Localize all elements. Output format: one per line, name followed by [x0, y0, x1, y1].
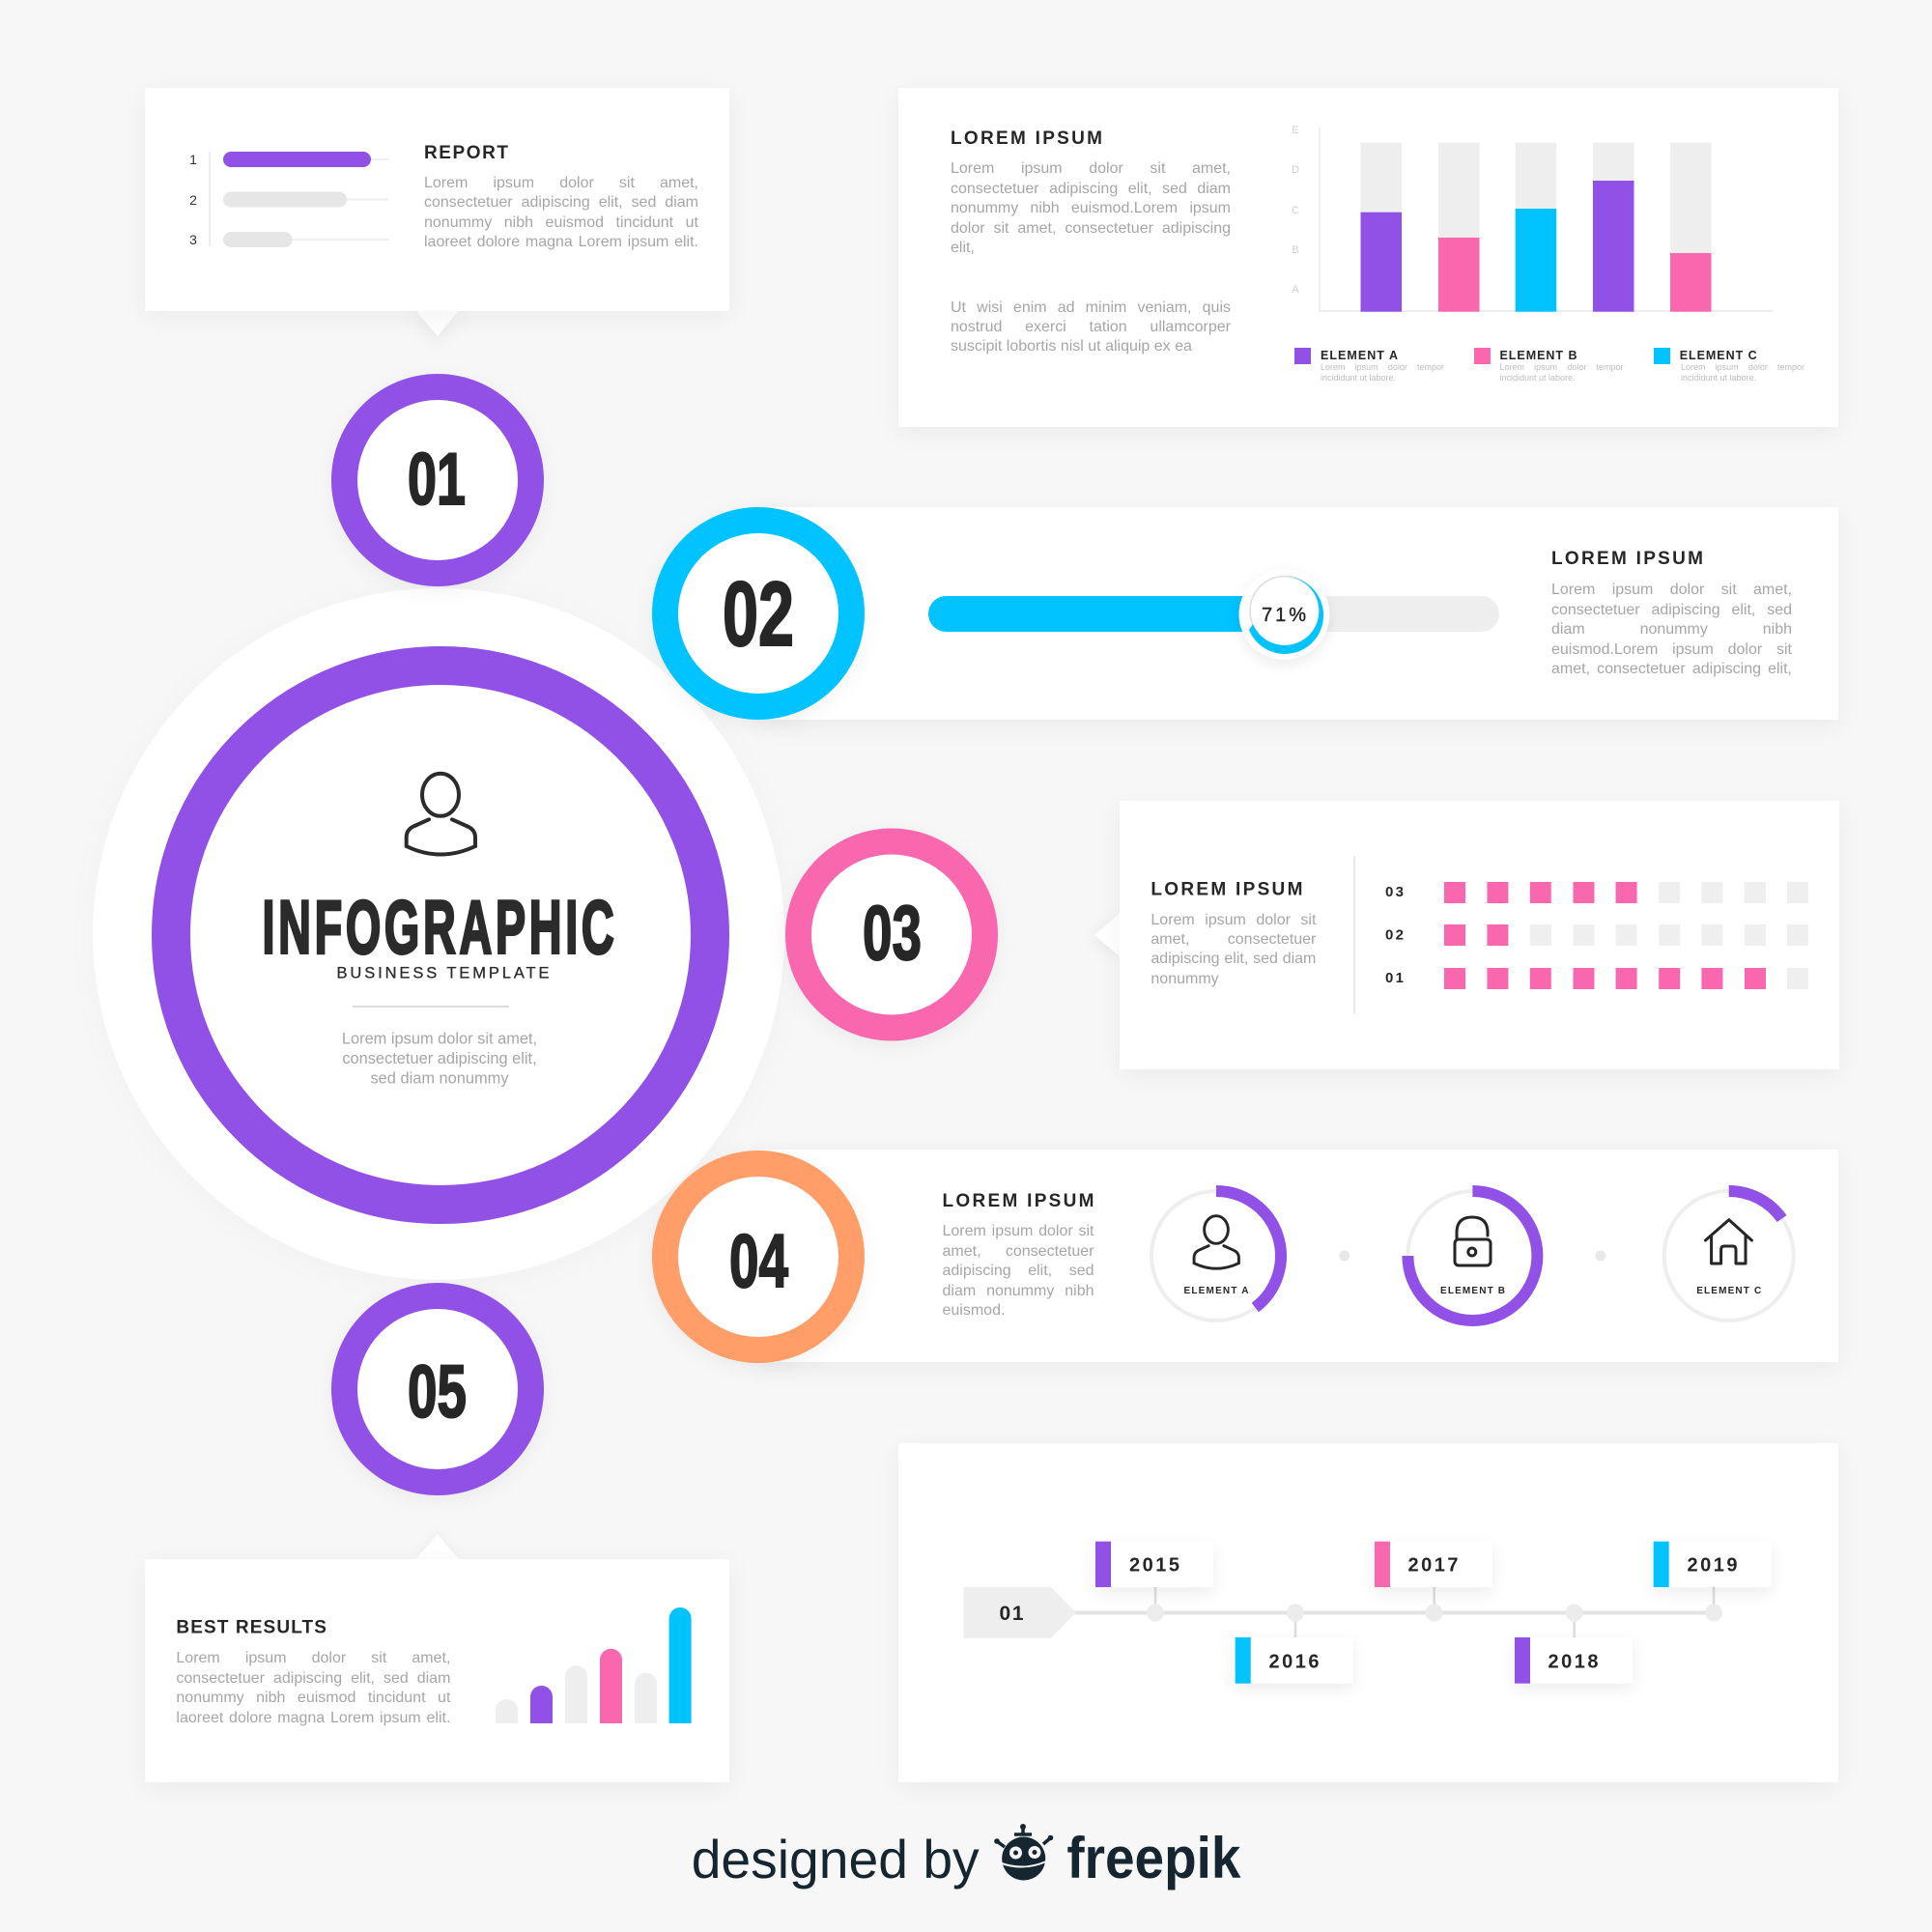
ring: element A: ELEMENT A: [1184, 1286, 1248, 1296]
legend: element B: [1474, 348, 1577, 364]
body text: Lorem ipsum dolor sit amet,: [1551, 582, 1792, 598]
text block 1: Lorem ipsum dolor sit amet,: [951, 160, 1231, 177]
panel: 02 progress: [758, 507, 1838, 720]
timeline graphics: [964, 1542, 1772, 1690]
card 2018: [1515, 1637, 1633, 1684]
chart graphics: [951, 125, 1773, 364]
legend text B: Lorem ipsum dolor tempor: [1499, 362, 1623, 372]
progress knob 71%: 71%: [1262, 605, 1306, 626]
legend text B: incididunt ut labore.: [1499, 373, 1576, 383]
axis labels: B: [1292, 244, 1299, 256]
progress knob 71%: [1238, 569, 1329, 660]
footer credit: freepik: [1066, 1826, 1241, 1890]
report bar chart: [189, 143, 508, 247]
row numbers: 3: [189, 232, 197, 247]
body text: euismod.: [943, 1302, 1005, 1319]
body text: Lorem ipsum dolor sit amet,: [176, 1650, 450, 1666]
footer credit: [692, 1824, 1241, 1890]
legend: element C: [1654, 348, 1757, 364]
axis labels: C: [1292, 205, 1299, 216]
legend text A: Lorem ipsum dolor tempor: [1321, 362, 1444, 372]
start tag 01: [964, 1587, 1076, 1638]
badge 01: [331, 374, 544, 586]
body text: adipiscing elit, sed: [943, 1263, 1094, 1279]
body text: laoreet dolore magna Lorem ipsum elit.: [176, 1710, 450, 1726]
row numbers: 2: [189, 192, 197, 208]
badge 01: 01: [408, 439, 466, 521]
body text: Lorem ipsum dolor sit: [943, 1223, 1094, 1239]
body text: amet, consectetuer: [1151, 931, 1316, 948]
legend: element B: ELEMENT B: [1499, 349, 1577, 362]
card 2016: [1236, 1637, 1353, 1684]
card 2016: 2016: [1269, 1652, 1320, 1673]
card 2017: [1375, 1542, 1492, 1587]
rings graphics: [943, 1185, 1795, 1326]
row labels: 01: [1385, 970, 1404, 986]
progress bar: [928, 596, 1499, 632]
card 2015: 2015: [1129, 1555, 1179, 1577]
row 03 squares: [1444, 882, 1808, 903]
card 2019: 2019: [1687, 1555, 1737, 1577]
squares graphics: [1151, 857, 1808, 1013]
panel: stacked bar chart: [898, 88, 1838, 427]
description: consectetuer adipiscing elit,: [342, 1050, 537, 1067]
panel: timeline: [898, 1443, 1838, 1782]
icon: freepik mascot: [994, 1824, 1053, 1880]
legend: element A: ELEMENT A: [1321, 349, 1398, 362]
badge 03: [785, 829, 998, 1041]
panel: 04 rings: [758, 1150, 1838, 1362]
legend text B: [1499, 362, 1623, 383]
text block 2: suscipit lobortis nisl ut aliquip ex ea: [951, 338, 1192, 355]
footer credit: designed by: [692, 1829, 980, 1889]
body text: Lorem ipsum dolor sit: [1151, 912, 1316, 927]
text block 1: consectetuer adipiscing elit, sed diam: [951, 181, 1231, 197]
panel: 03 squares: [1120, 801, 1839, 1069]
icon: person: [407, 774, 475, 854]
body text: consectetuer adipiscing elit, sed: [1551, 602, 1792, 618]
row 01 squares: [1444, 968, 1808, 989]
body text: nonummy nibh euismod tincidunt ut: [176, 1690, 450, 1706]
report text: consectetuer adipiscing elit, sed diam: [424, 194, 698, 211]
ring: element B: [1407, 1191, 1537, 1321]
card 2019: [1654, 1542, 1772, 1587]
report text: Lorem ipsum dolor sit amet,: [424, 175, 698, 191]
axis labels: D: [1292, 164, 1299, 176]
body text: adipiscing elit, sed diam: [1151, 951, 1316, 967]
rounded bar chart: [496, 1607, 692, 1723]
body text: [1151, 912, 1316, 987]
panel: report: [145, 88, 729, 311]
body text: [176, 1650, 450, 1726]
timeline axis: [1072, 1587, 1722, 1638]
text block 1: nonummy nibh euismod.Lorem ipsum: [951, 200, 1231, 216]
body text: euismod.Lorem ipsum dolor sit: [1551, 641, 1792, 658]
heading: LOREM IPSUM: [943, 1191, 1094, 1211]
separator dots: [1339, 1250, 1605, 1262]
row labels: 03: [1385, 884, 1404, 900]
row numbers: [189, 152, 197, 247]
heading: LOREM IPSUM: [1151, 879, 1302, 900]
description: [342, 1031, 537, 1088]
text block 1: elit,: [951, 240, 975, 256]
body text: amet, consectetuer: [943, 1243, 1094, 1260]
badge 05: [331, 1283, 544, 1495]
body text: diam nonummy nibh: [943, 1283, 1094, 1299]
body text: diam nonummy nibh: [1551, 621, 1792, 638]
axis labels: A: [1292, 284, 1299, 296]
badge 02: 02: [723, 563, 794, 666]
badge 05: 05: [408, 1350, 467, 1434]
legend: element C: ELEMENT C: [1680, 349, 1757, 362]
ring: element B: ELEMENT B: [1440, 1286, 1505, 1296]
badge 02: [652, 507, 865, 720]
legend text C: [1681, 362, 1804, 383]
description: sed diam nonummy: [370, 1070, 509, 1088]
description: Lorem ipsum dolor sit amet,: [342, 1031, 537, 1048]
progress graphics: [928, 549, 1703, 666]
ring: element A: [1151, 1191, 1281, 1321]
heading: LOREM IPSUM: [1551, 549, 1703, 569]
card 2017: 2017: [1408, 1555, 1459, 1577]
legend text A: [1321, 362, 1444, 383]
row numbers: 1: [189, 152, 197, 167]
row 02 squares: [1444, 924, 1808, 946]
report text: [424, 175, 698, 250]
body text: [943, 1223, 1094, 1319]
bars: [209, 152, 388, 247]
axis labels: [1292, 125, 1299, 296]
title: INFOGRAPHIC: [263, 885, 614, 969]
panel: best results: [145, 1559, 729, 1782]
heading: BEST RESULTS: [176, 1618, 327, 1638]
text block 2: Ut wisi enim ad minim veniam, quis: [951, 299, 1231, 315]
body text: nonummy: [1151, 971, 1219, 987]
badge 03: 03: [863, 890, 922, 976]
start tag 01: 01: [999, 1603, 1024, 1625]
axis labels: E: [1292, 125, 1299, 136]
row labels: [1385, 884, 1404, 986]
central circle: [93, 588, 784, 1280]
heading: LOREM IPSUM: [951, 128, 1102, 149]
best results graphics: [176, 1607, 692, 1723]
ring: element C: [1664, 1191, 1794, 1321]
report text: nonummy nibh euismod tincidunt ut: [424, 214, 698, 231]
text block 2: nostrud exerci tation ullamcorper: [951, 319, 1231, 335]
legend: element A: [1294, 348, 1398, 364]
body text: [1551, 582, 1792, 677]
body text: amet, consectetuer adipiscing elit,: [1551, 661, 1792, 677]
row labels: 02: [1385, 927, 1404, 943]
text block 1: dolor sit amet, consectetuer adipiscing: [951, 220, 1231, 237]
legend text C: Lorem ipsum dolor tempor: [1681, 362, 1804, 372]
legend text A: incididunt ut labore.: [1321, 373, 1396, 383]
bar chart: [1319, 128, 1773, 312]
report text: laoreet dolore magna Lorem ipsum elit.: [424, 234, 698, 250]
subtitle: BUSINESS TEMPLATE: [336, 964, 549, 981]
badge 04: [652, 1151, 865, 1363]
card 2015: [1095, 1542, 1213, 1587]
legend text C: incididunt ut labore.: [1681, 373, 1756, 383]
text block 1: [951, 160, 1231, 256]
body text: consectetuer adipiscing elit, sed diam: [176, 1670, 450, 1687]
heading: REPORT: [424, 143, 508, 163]
ring: element C: ELEMENT C: [1696, 1286, 1761, 1296]
text block 2: [951, 299, 1231, 355]
badge 04: 04: [729, 1218, 788, 1303]
card 2018: 2018: [1548, 1652, 1598, 1673]
